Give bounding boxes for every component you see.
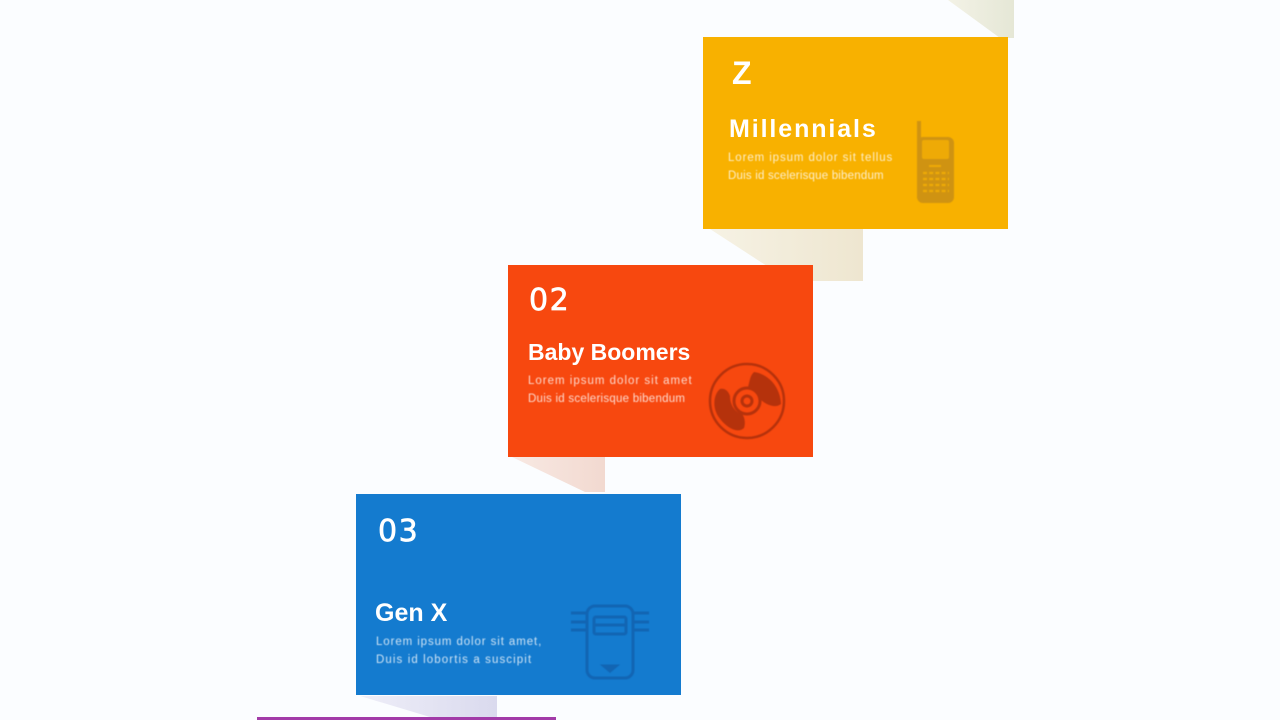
icon: mobile phone xyxy=(916,120,954,204)
step number: Z xyxy=(732,55,752,91)
description: Lorem ipsum dolor sit amet xyxy=(528,375,693,387)
card: Gen X step xyxy=(356,494,681,695)
description xyxy=(728,151,893,182)
card: fourth step, cropped by page edge xyxy=(257,717,556,720)
heading: Baby Boomers xyxy=(528,339,690,365)
heading: Gen X xyxy=(375,599,447,627)
description: Duis id scelerisque bibendum xyxy=(528,393,685,405)
step number: 02 xyxy=(529,283,570,318)
icon: pager device xyxy=(570,604,650,680)
description xyxy=(376,635,542,666)
description xyxy=(528,374,693,406)
step number: 03 xyxy=(378,514,419,549)
card: Millennials step xyxy=(703,37,1008,229)
description: Lorem ipsum dolor sit tellus xyxy=(728,152,893,164)
description: Lorem ipsum dolor sit amet, xyxy=(376,636,542,648)
icon: compact disc xyxy=(708,362,786,440)
heading: Millennials xyxy=(729,115,878,143)
description: Duis id lobortis a suscipit xyxy=(376,654,532,666)
card: Baby Boomers step xyxy=(508,265,813,457)
description: Duis id scelerisque bibendum xyxy=(728,170,884,182)
